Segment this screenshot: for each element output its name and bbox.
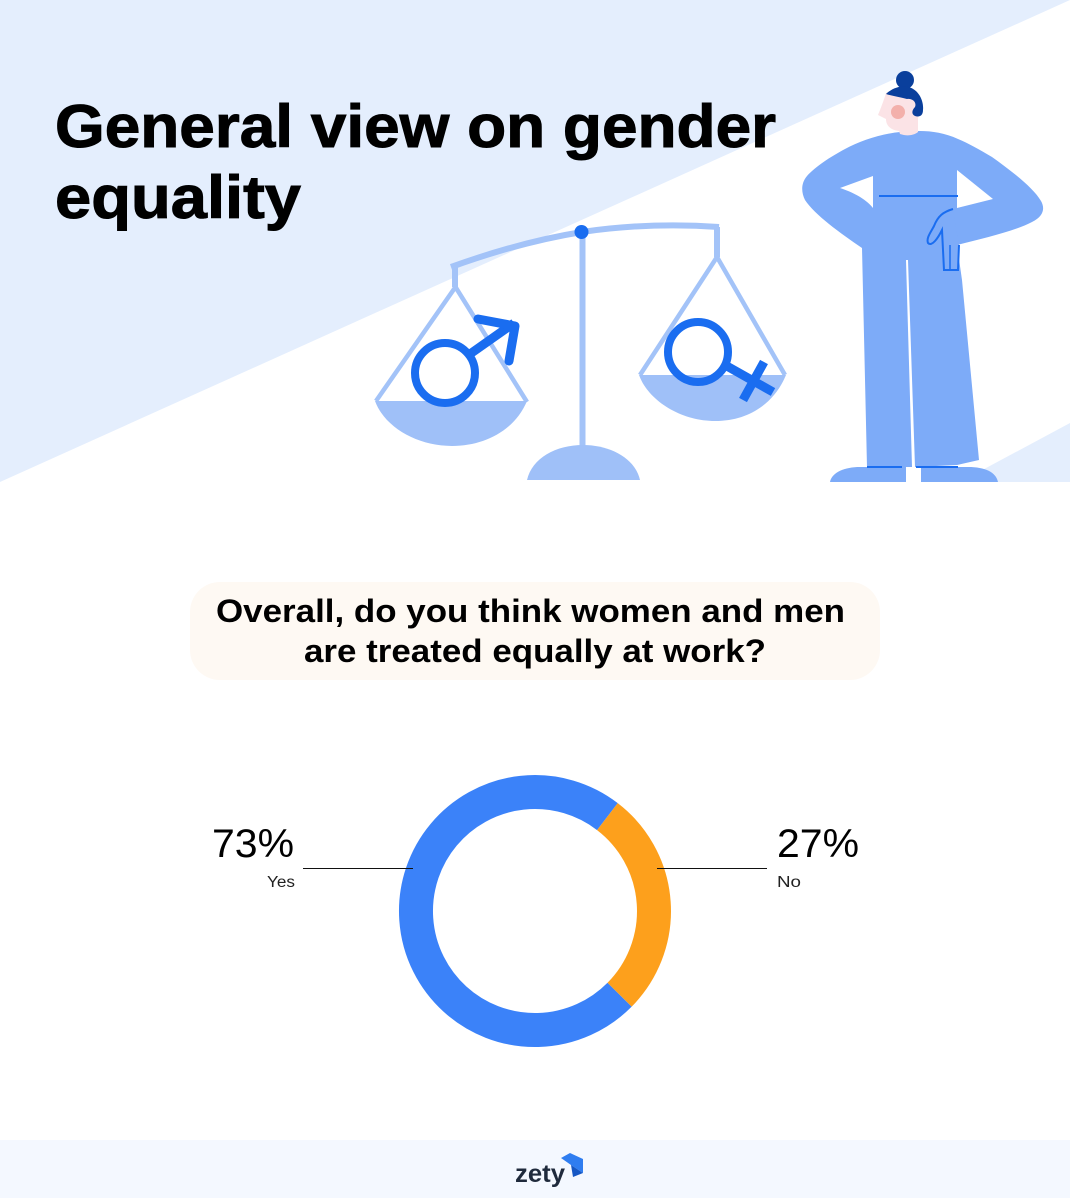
label: 27% no [657,822,859,891]
neck and head [878,91,920,135]
waist line [879,195,958,197]
right pan with female symbol [639,257,786,421]
no segment 27% [607,817,654,995]
label: 27% no: No [777,874,801,891]
label: 73% yes [212,822,413,891]
yes segment 73% [416,792,620,1030]
label: 73% yes: 73% [212,822,294,866]
question pill: are treated equally at work? [304,633,766,669]
question pill [190,582,880,680]
zety logo [515,1153,583,1188]
shoes [830,467,998,482]
zety logo: zety [515,1160,565,1188]
hand [928,209,959,270]
left pan with male symbol [375,287,527,446]
cheek [891,105,905,119]
label: 27% no: 27% [777,822,859,866]
footer band [0,1140,1070,1198]
illustration: woman [802,71,1043,482]
header background shapes [0,0,1070,482]
hair [886,71,923,116]
donut chart [416,792,654,1030]
question pill: Overall, do you think women and men [216,593,845,629]
scale base [527,445,640,480]
body [802,131,1043,467]
title: General view on gender [55,93,776,160]
trouser hem lines [867,466,958,468]
title [55,93,776,231]
title: equality [55,164,302,231]
illustration: balance scale [375,225,786,480]
label: 73% yes: Yes [267,874,295,891]
scale pivot [574,225,588,239]
